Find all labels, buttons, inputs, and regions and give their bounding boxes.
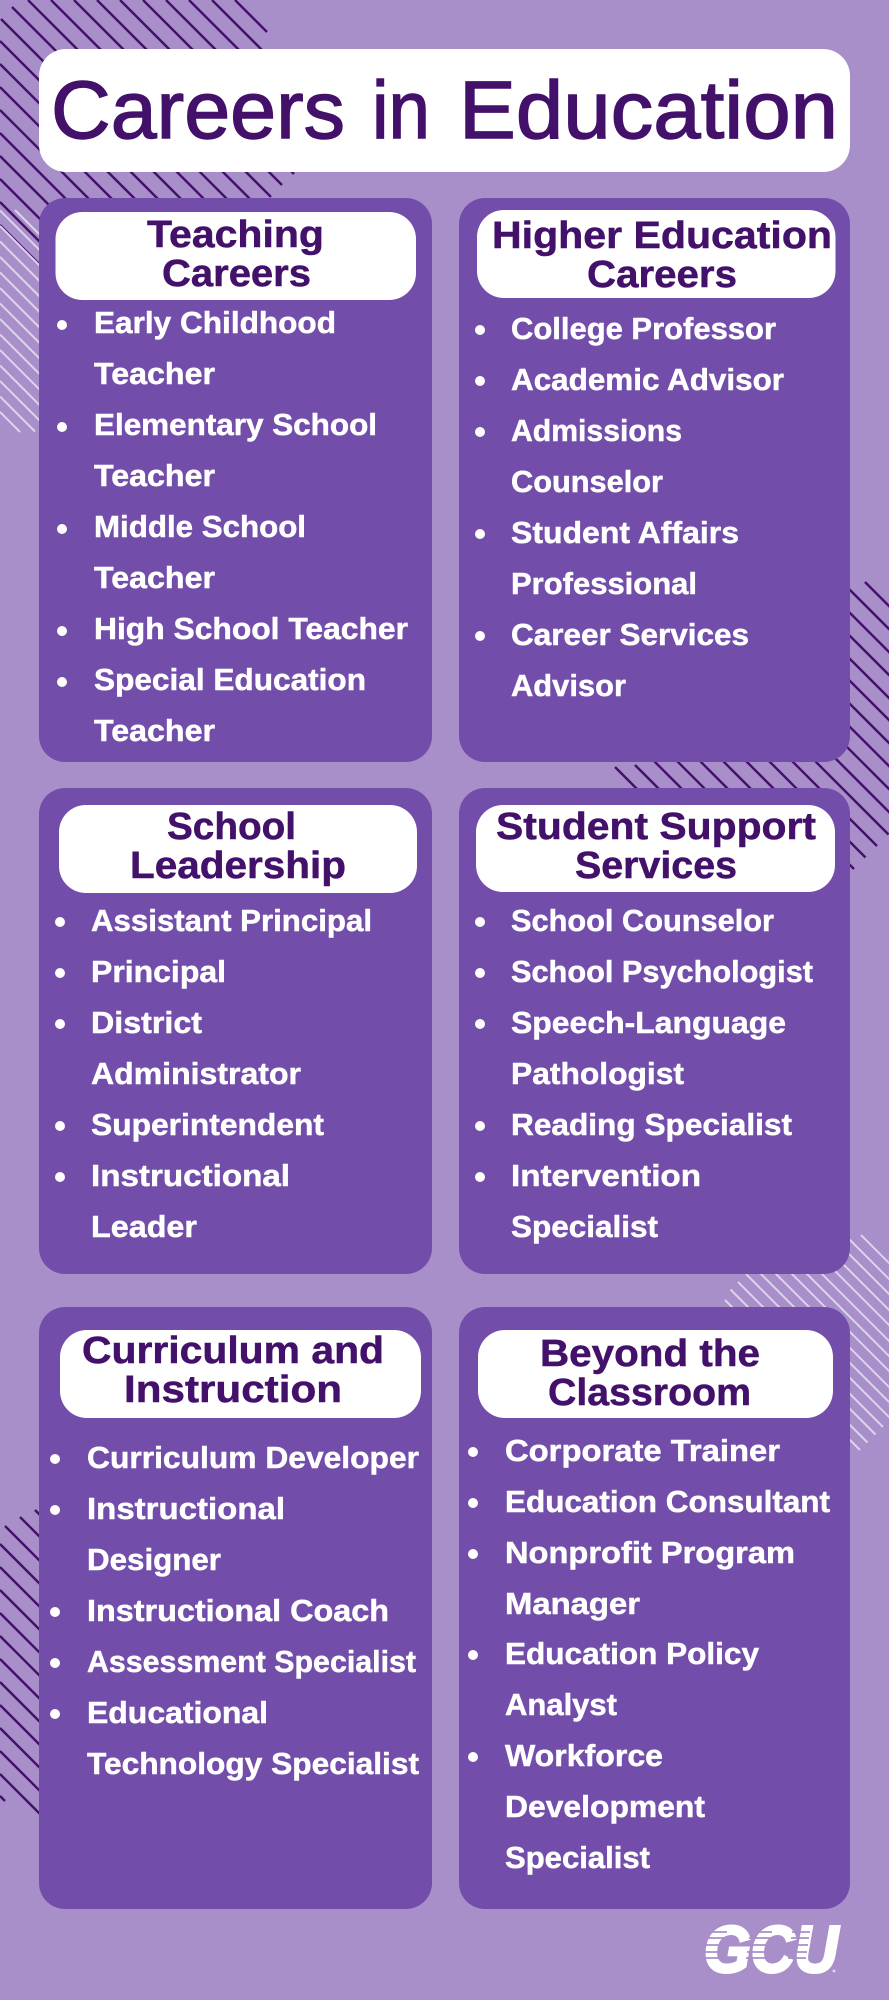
list: student support services: Reading Specialist: [511, 1107, 792, 1142]
heading: curriculum and instruction: [60, 1330, 421, 1418]
heading: student support services: [476, 805, 835, 892]
list: higher education careers: Counselor: [511, 464, 663, 499]
heading: beyond the classroom: Beyond the: [540, 1333, 760, 1375]
heading: student support services: Services: [575, 845, 737, 887]
list: student support services: Intervention: [511, 1158, 701, 1193]
list: curriculum and instruction: [50, 1440, 419, 1781]
list: student support services: Specialist: [511, 1209, 658, 1244]
list: teaching careers: Middle School: [94, 509, 306, 544]
list: beyond the classroom: Manager: [505, 1586, 640, 1621]
list: teaching careers: Teacher: [94, 356, 215, 391]
list: teaching careers: High School Teacher: [94, 611, 408, 646]
list: higher education careers: Professional: [511, 566, 697, 601]
list: beyond the classroom: Nonprofit Program: [505, 1535, 795, 1570]
list: teaching careers: Teacher: [94, 560, 215, 595]
panel: curriculum and instruction: [39, 1307, 432, 1909]
heading: beyond the classroom: Classroom: [548, 1372, 751, 1414]
list: beyond the classroom: Analyst: [505, 1687, 617, 1722]
list: beyond the classroom: Corporate Trainer: [505, 1433, 780, 1468]
list: curriculum and instruction: Instructional: [87, 1491, 285, 1526]
heading: school leadership: [59, 805, 417, 893]
heading: teaching careers: Teaching: [147, 214, 324, 256]
title: [39, 49, 850, 172]
heading: school leadership: Leadership: [130, 845, 346, 887]
list: school leadership: Principal: [91, 954, 226, 989]
heading: curriculum and instruction: Curriculum and: [82, 1330, 384, 1372]
list: curriculum and instruction: Instructional Coach: [87, 1593, 389, 1628]
list: higher education careers: Career Services: [511, 617, 749, 652]
list: beyond the classroom: Education Policy: [505, 1636, 760, 1671]
list: teaching careers: Elementary School: [94, 407, 377, 442]
list: beyond the classroom: [468, 1433, 830, 1875]
list: school leadership: District: [91, 1005, 202, 1040]
heading: student support services: Student Support: [496, 806, 816, 848]
title: Careers: [51, 65, 345, 156]
list: school leadership: Leader: [91, 1209, 197, 1244]
panel: higher education careers: [459, 198, 850, 762]
logo: GCU: GCU: [704, 1912, 840, 1986]
list: student support services: School Counselor: [511, 903, 774, 938]
heading: higher education careers: Careers: [587, 254, 737, 296]
heading: teaching careers: Careers: [162, 253, 311, 295]
list: beyond the classroom: Education Consultant: [505, 1484, 830, 1519]
list: beyond the classroom: Development: [505, 1789, 705, 1824]
list: student support services: School Psychologist: [511, 954, 813, 989]
list: curriculum and instruction: Designer: [87, 1542, 221, 1577]
list: student support services: Pathologist: [511, 1056, 684, 1091]
heading: beyond the classroom: [478, 1330, 833, 1418]
list: curriculum and instruction: Technology Specialist: [87, 1746, 419, 1781]
list: school leadership: Superintendent: [91, 1107, 324, 1142]
list: curriculum and instruction: Assessment Specialist: [87, 1644, 416, 1679]
list: higher education careers: [475, 311, 784, 703]
list: higher education careers: Advisor: [511, 668, 626, 703]
heading: higher education careers: [477, 210, 836, 298]
list: curriculum and instruction: Educational: [87, 1695, 268, 1730]
list: higher education careers: Admissions: [511, 413, 682, 448]
heading: higher education careers: Higher Education: [492, 215, 832, 257]
panel: school leadership: [39, 788, 432, 1274]
list: school leadership: Assistant Principal: [91, 903, 372, 938]
list: teaching careers: [57, 305, 408, 748]
list: school leadership: [55, 903, 372, 1244]
panel: teaching careers: [39, 198, 432, 762]
list: curriculum and instruction: Curriculum Developer: [87, 1440, 419, 1475]
list: higher education careers: Student Affairs: [511, 515, 739, 550]
list: beyond the classroom: Workforce: [505, 1738, 663, 1773]
list: teaching careers: Teacher: [94, 458, 215, 493]
heading: curriculum and instruction: Instruction: [124, 1369, 342, 1411]
list: beyond the classroom: Specialist: [505, 1840, 650, 1875]
title: Education: [459, 65, 838, 156]
list: teaching careers: Special Education: [94, 662, 366, 697]
list: teaching careers: Teacher: [94, 713, 215, 748]
list: higher education careers: Academic Advisor: [511, 362, 784, 397]
title: in: [372, 65, 430, 156]
panel: student support services: [459, 788, 850, 1274]
panel: beyond the classroom: [459, 1307, 850, 1909]
heading: teaching careers: [56, 212, 416, 300]
list: student support services: Speech-Language: [511, 1005, 786, 1040]
list: school leadership: Instructional: [91, 1158, 290, 1193]
list: higher education careers: College Professor: [511, 311, 776, 346]
list: school leadership: Administrator: [91, 1056, 301, 1091]
list: student support services: [475, 903, 813, 1244]
heading: school leadership: School: [167, 806, 296, 848]
list: teaching careers: Early Childhood: [94, 305, 336, 340]
